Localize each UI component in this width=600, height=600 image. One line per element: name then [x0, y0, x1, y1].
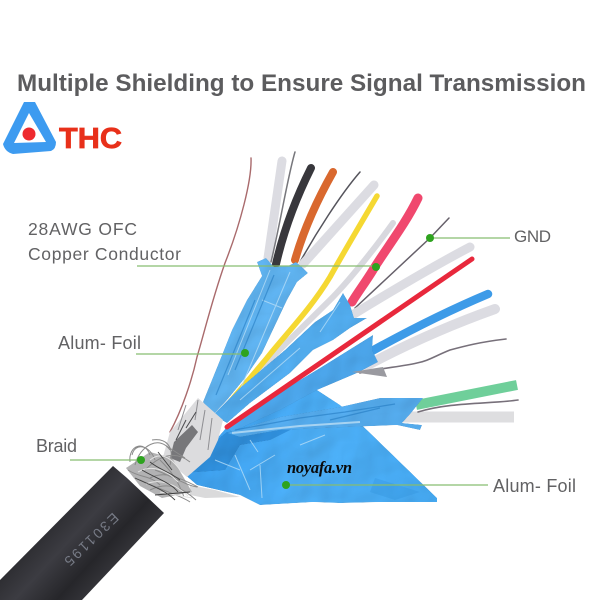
title: Multiple Shielding to Ensure Signal Transmission	[17, 70, 586, 97]
callout: lower alum foil: Alum- Foil	[493, 476, 576, 496]
callout: braid: Braid	[36, 436, 77, 456]
panel: upper foil band	[227, 398, 423, 437]
callout: lower alum foil	[282, 476, 576, 496]
yellow and grey wires	[230, 196, 393, 402]
callout: GND	[426, 227, 551, 246]
jacket print: E301195	[61, 510, 122, 569]
thin copper wire	[170, 158, 251, 432]
red wire	[227, 259, 472, 427]
green and grey wires	[402, 385, 518, 417]
panel: silver foil	[163, 398, 223, 477]
callout: braid	[36, 436, 145, 464]
callout: 28AWG OFC copper conductor: Copper Conductor	[28, 244, 181, 264]
blue and grey wires	[360, 294, 506, 373]
panel: foil on middle bundle	[213, 293, 367, 423]
callout: 28AWG OFC copper conductor	[28, 219, 380, 271]
braid	[126, 440, 198, 502]
pale foil tail	[190, 485, 240, 498]
watermark: noyafa.vn	[287, 458, 352, 477]
callout: upper alum foil: Alum- Foil	[58, 333, 141, 353]
icon: blue triangle with red dot	[3, 102, 56, 154]
callout: 28AWG OFC copper conductor: 28AWG OFC	[28, 219, 137, 239]
callout: upper alum foil	[58, 333, 249, 357]
pink wire group	[352, 198, 470, 314]
logo: THC	[3, 102, 122, 155]
panel: foil strip with grey tail	[227, 335, 387, 432]
cable jacket	[0, 466, 164, 600]
logo wordmark: THC	[59, 123, 122, 155]
bundle one wires	[268, 152, 374, 264]
callout: GND: GND	[514, 227, 551, 246]
panel: large alum foil sheet	[183, 390, 437, 505]
panel: foil on upper bundle	[203, 258, 308, 415]
